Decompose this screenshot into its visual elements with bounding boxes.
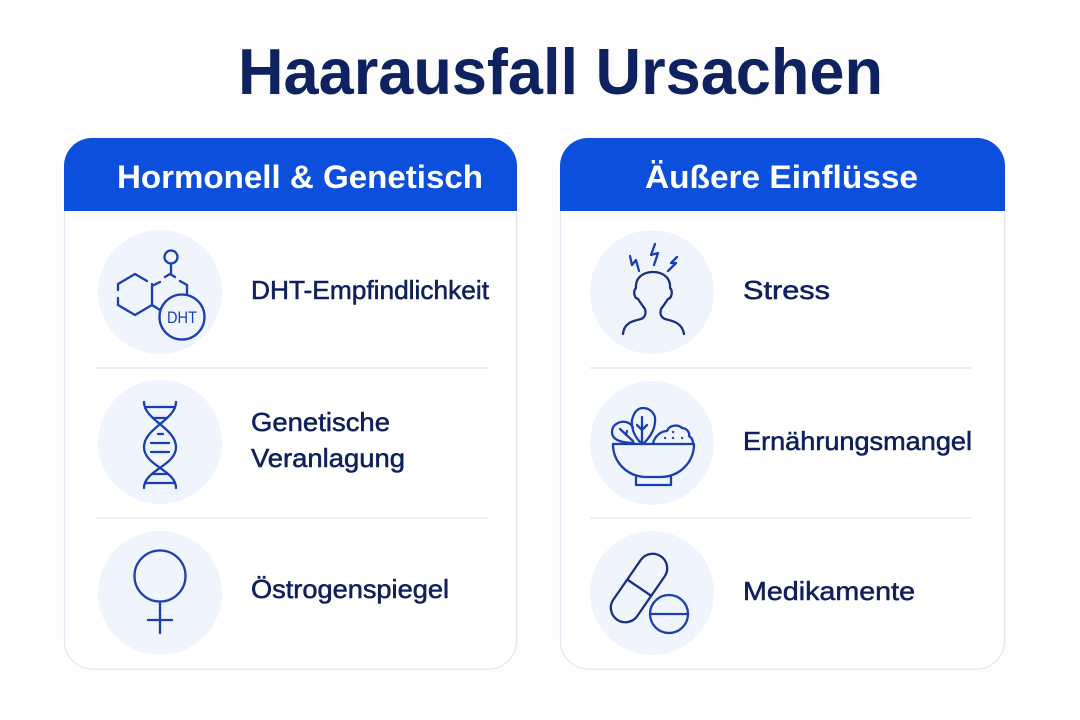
icon: capsule and tablet [605,548,688,633]
panel: Äußere Einflüsse [560,138,1005,669]
panel: Hormonell & Genetisch [64,138,517,669]
item: Stress: Stress [743,275,830,305]
icon: salad bowl [612,408,694,485]
icon: head with stress bolts [623,244,684,334]
item: Östrogenspiegel: Östrogenspiegel [251,574,449,604]
item: Stress [590,230,830,354]
title: Haarausfall Ursachen [238,35,883,108]
icon: DHT molecule [118,250,204,340]
panel header: Äußere Einflüsse [560,138,1005,211]
item: Genetische Veranlagung: Veranlagung [251,443,405,473]
item: Medikamente: Medikamente [743,576,915,606]
item: DHT-Empfindlichkeit: DHT-Empfindlichkeit [251,275,490,305]
item: Ernährungsmangel [590,381,972,505]
icon: DHT molecule: DHT [167,309,197,327]
item: Medikamente [590,531,915,655]
item: Genetische Veranlagung: Genetische [251,407,390,437]
icon: DNA helix [144,402,176,488]
panel header: Hormonell & Genetisch [64,138,517,211]
icon: female symbol [134,550,186,633]
item: DHT-Empfindlichkeit [98,230,490,354]
panel header: Äußere Einflüsse: Äußere Einflüsse [645,159,918,195]
panel header: Hormonell & Genetisch: Hormonell & Genetisch [117,159,483,195]
item: Genetische Veranlagung [98,380,405,504]
item: Ernährungsmangel: Ernährungsmangel [743,426,972,456]
item: Östrogenspiegel [98,531,449,655]
